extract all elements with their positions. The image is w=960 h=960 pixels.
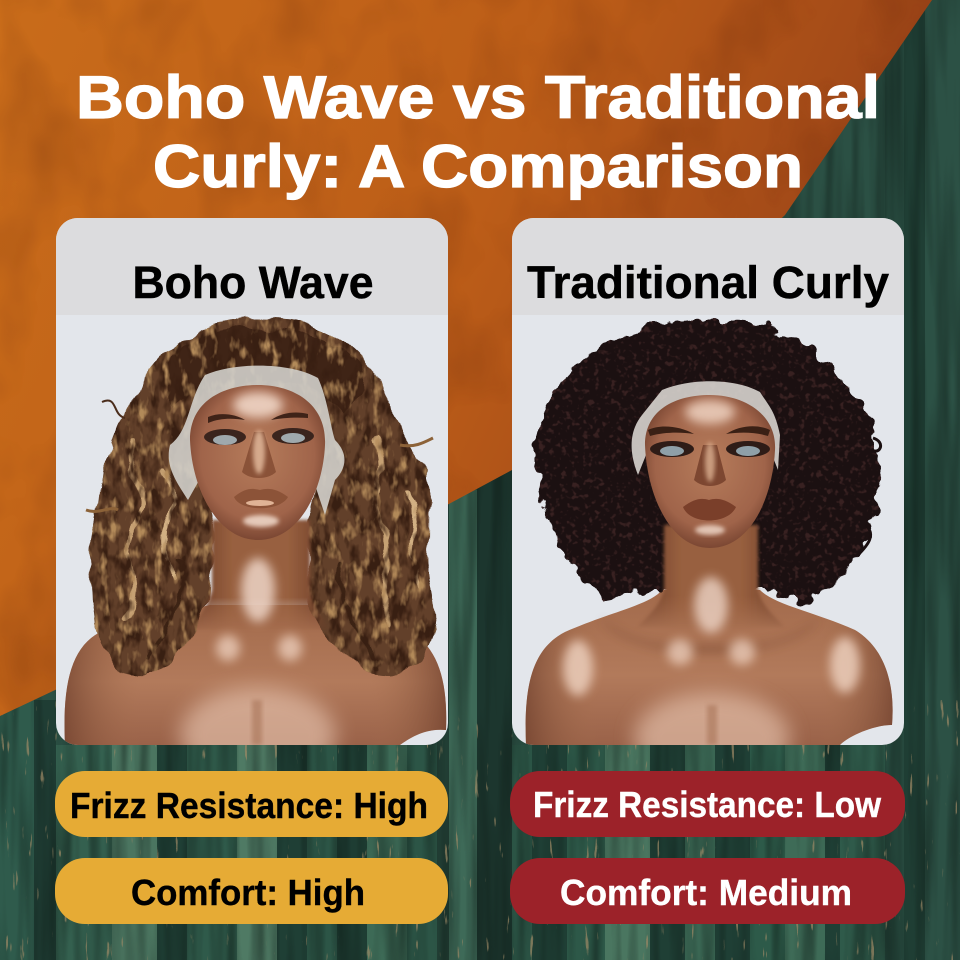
- pill: boho comfort: [55, 858, 448, 924]
- panel heading band: boho wave: Boho Wave: [132, 257, 374, 308]
- hair mass: [91, 318, 436, 679]
- pill: curly comfort: [510, 858, 905, 924]
- panel heading band: traditional curly: Traditional Curly: [527, 257, 889, 308]
- face: [190, 385, 325, 540]
- hair mass: [536, 318, 881, 602]
- collar shadow: [629, 637, 776, 656]
- background: orange diagonal field: [0, 0, 960, 720]
- panel heading band: boho wave: [56, 218, 448, 315]
- pill: curly comfort: Comfort: Medium: [560, 872, 852, 913]
- pill: boho frizz resistance: Frizz Resistance: High: [70, 785, 428, 826]
- pill: boho frizz resistance: [55, 771, 448, 837]
- lace front: [632, 381, 780, 475]
- face: [645, 395, 775, 548]
- title: Curly: A Comparison: [153, 133, 803, 200]
- neck: [190, 520, 330, 630]
- title: Boho Wave vs Traditional: [76, 64, 880, 131]
- illustration: wavy brown wig on mannequin: [65, 318, 446, 783]
- panel: boho wave: [56, 218, 448, 783]
- panel heading band: traditional curly: [512, 218, 904, 315]
- lace front: [169, 366, 344, 515]
- pill: boho comfort: Comfort: High: [131, 872, 365, 913]
- pill: curly frizz resistance: [510, 771, 905, 837]
- pill: curly frizz resistance: Frizz Resistance: Low: [533, 784, 882, 825]
- illustration: black curly wig on mannequin: [526, 318, 893, 784]
- neck: [637, 525, 785, 628]
- panel: traditional curly: [512, 218, 904, 784]
- title: [76, 64, 880, 200]
